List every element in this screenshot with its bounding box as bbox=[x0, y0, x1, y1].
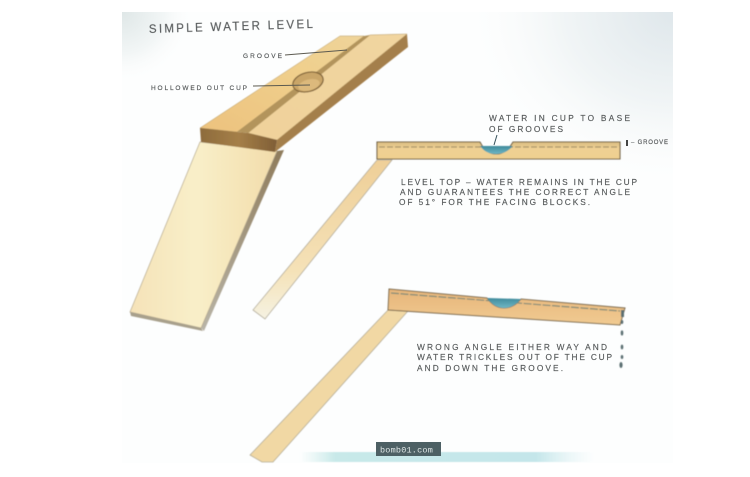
isometric wooden water level bbox=[130, 34, 408, 331]
text: wrong angle explanation: WRONG ANGLE EITHER WAY AND bbox=[417, 342, 607, 352]
text: level top explanation: AND GUARANTEES THE CORRECT ANGLE bbox=[400, 187, 630, 197]
water callout: WATER IN CUP TO BASE bbox=[489, 113, 630, 123]
groove channel bbox=[237, 35, 370, 133]
wrong angle diagram bbox=[250, 289, 625, 462]
label: groove bbox=[243, 50, 347, 60]
teal wash at bottom of the paper bbox=[300, 452, 595, 462]
top surface, left of groove bbox=[200, 36, 364, 132]
water drips bbox=[619, 310, 624, 368]
front end grain bbox=[200, 128, 277, 152]
label: hollowed out cup: HOLLOWED OUT CUP bbox=[151, 85, 247, 92]
water in cup bbox=[487, 298, 521, 308]
thin leg bbox=[253, 160, 392, 319]
title: SIMPLE WATER LEVEL bbox=[149, 19, 314, 36]
groove marker: – GROOVE bbox=[631, 140, 668, 146]
lower plank leg bbox=[130, 142, 284, 331]
label: groove: GROOVE bbox=[243, 53, 283, 60]
level bar with cup notch bbox=[377, 142, 620, 159]
water callout: OF GROOVES bbox=[489, 124, 563, 134]
text: wrong angle explanation bbox=[417, 342, 612, 373]
long thin leg bbox=[250, 310, 408, 462]
top surface, right of groove bbox=[248, 34, 407, 140]
hollowed-out cup bbox=[291, 69, 325, 95]
paper background bbox=[122, 12, 673, 463]
correct level diagram bbox=[253, 142, 620, 319]
water in cup bbox=[480, 146, 513, 154]
watermark badge: bomb01.com bbox=[380, 446, 433, 456]
watermark badge bbox=[376, 442, 441, 456]
side face of crosspiece bbox=[275, 34, 408, 152]
text: wrong angle explanation: WATER TRICKLES OUT OF THE CUP bbox=[417, 352, 612, 362]
text: level top explanation: LEVEL TOP – WATER REMAINS IN THE CUP bbox=[401, 177, 637, 187]
water callout bbox=[489, 113, 630, 145]
text: wrong angle explanation: AND DOWN THE GROOVE. bbox=[417, 363, 563, 373]
groove line bbox=[391, 293, 620, 311]
tilted level bar with cup bbox=[388, 289, 625, 325]
text: level top explanation bbox=[399, 177, 637, 207]
text: level top explanation: OF 51° FOR THE FACING BLOCKS. bbox=[399, 197, 590, 207]
groove line bbox=[379, 146, 618, 148]
